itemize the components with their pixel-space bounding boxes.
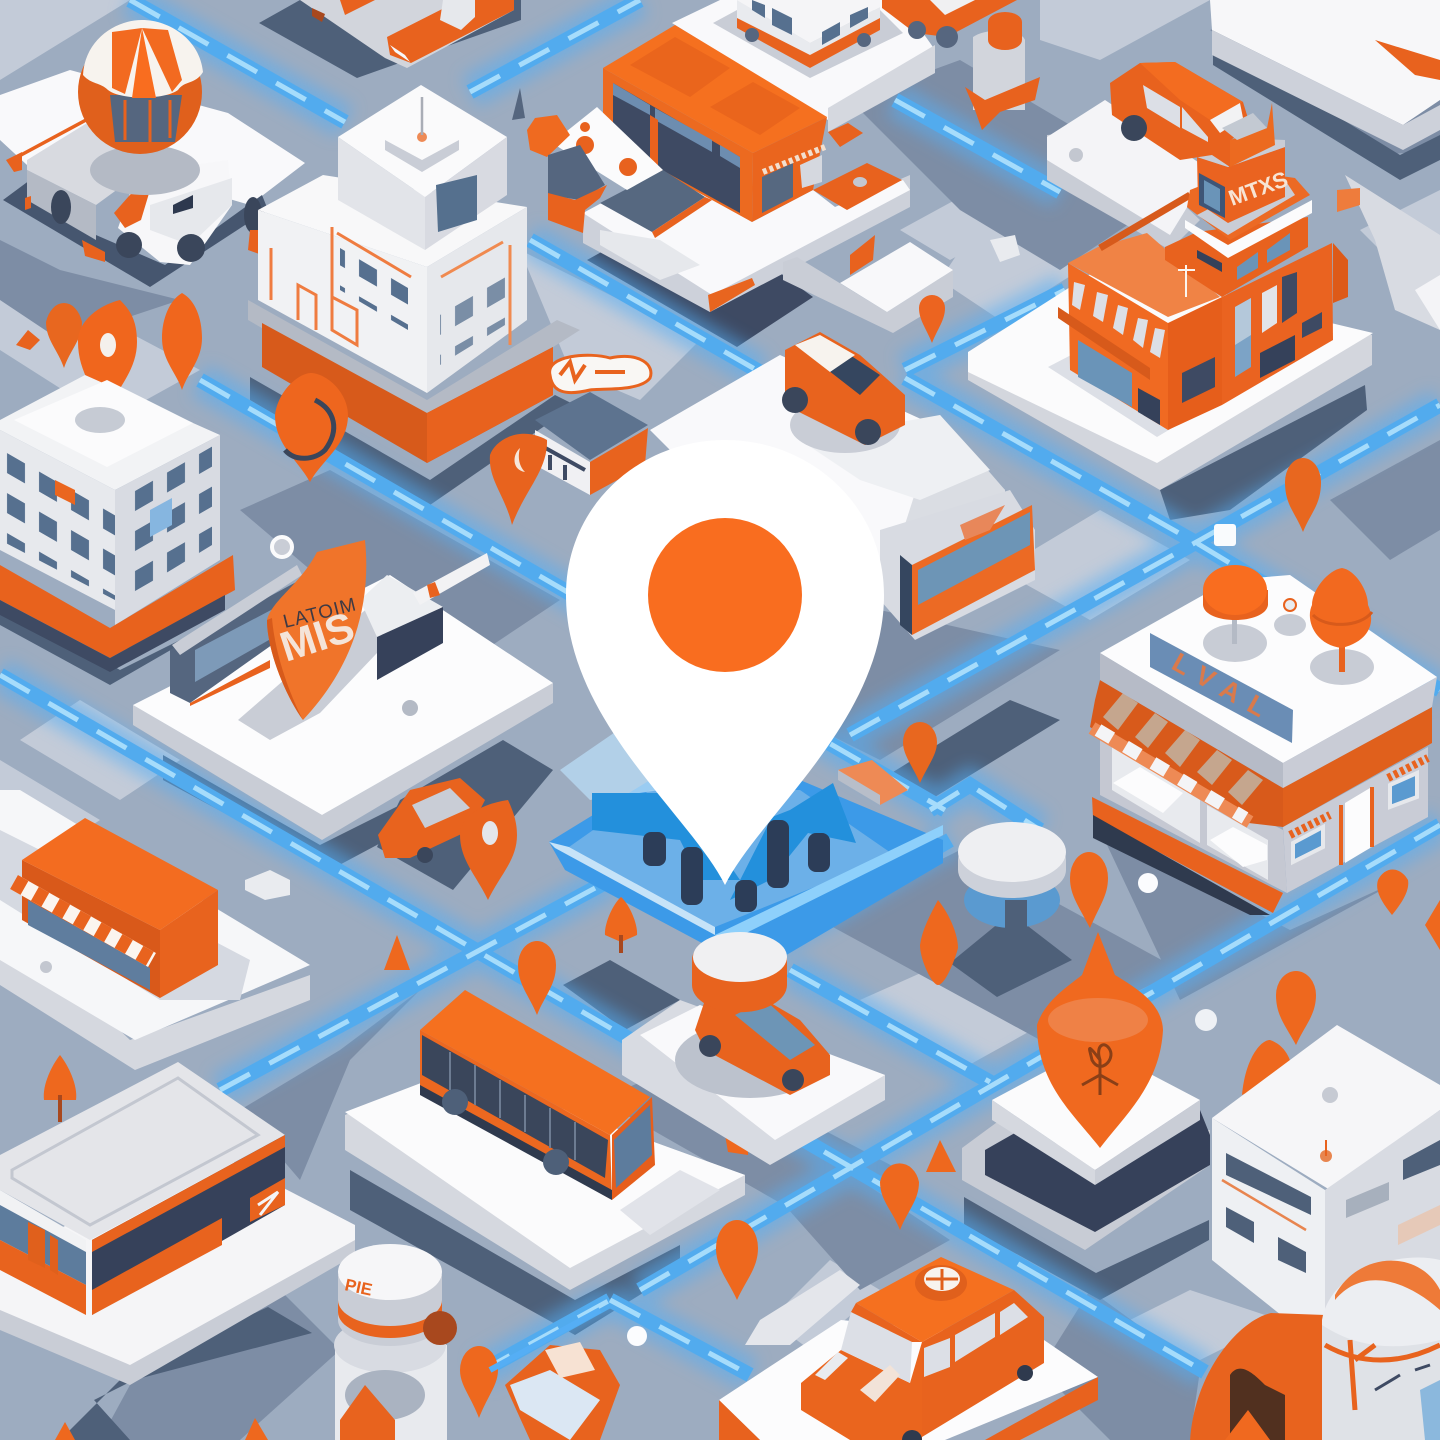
white tower with orange base — [248, 85, 580, 463]
main location pin — [566, 440, 884, 885]
top centre: capsule vehicle on dark base — [259, 0, 521, 78]
slab below left of van — [1047, 100, 1210, 250]
bottom pad with car — [719, 1257, 1098, 1440]
bus stop canopy slab — [549, 715, 943, 957]
bottom-centre drum — [334, 1244, 457, 1440]
car on slab with dome — [622, 932, 885, 1165]
bottom-right orange figure — [1190, 1258, 1440, 1440]
sign: LVAL: LVAL — [1167, 647, 1282, 729]
left market with awning — [0, 790, 310, 1070]
sign: MIS: MIS — [274, 603, 360, 671]
small car with pin — [378, 778, 517, 900]
top left: parasol and truck — [0, 20, 305, 287]
top centre: orange van and bottle — [882, 0, 1040, 130]
small slab with pin — [783, 235, 1020, 343]
label: drum: PIE — [343, 1275, 374, 1300]
round kiosk — [958, 822, 1066, 935]
orange shop with MTXS tower — [968, 62, 1373, 490]
figures near road — [512, 88, 525, 120]
right cafe building — [1090, 565, 1437, 915]
car on rear slab behind pin — [650, 332, 1005, 590]
orange market hall — [527, 25, 910, 312]
mid-map small pins and dots — [627, 458, 1321, 1346]
orange tram behind pin — [880, 490, 1035, 640]
left pins cluster — [16, 293, 348, 482]
sign: MTXS: MTXS — [1225, 166, 1291, 211]
left office building — [0, 375, 235, 672]
MIS sign slab — [133, 537, 553, 840]
shield pin on plinth — [962, 932, 1210, 1250]
sign: LATOIM: LATOIM — [281, 594, 359, 633]
top right slab — [1210, 0, 1440, 330]
bottom-centre orange kiosk — [490, 1310, 620, 1440]
top centre: minibus slab — [672, 0, 935, 132]
orange bus on slab — [345, 990, 745, 1290]
speech sign and small kiosk — [490, 355, 651, 525]
scattered orange trees and pins centre — [44, 852, 1440, 1440]
bottom-left bus terminal — [0, 1062, 355, 1385]
bottom-right building — [1212, 1025, 1440, 1350]
